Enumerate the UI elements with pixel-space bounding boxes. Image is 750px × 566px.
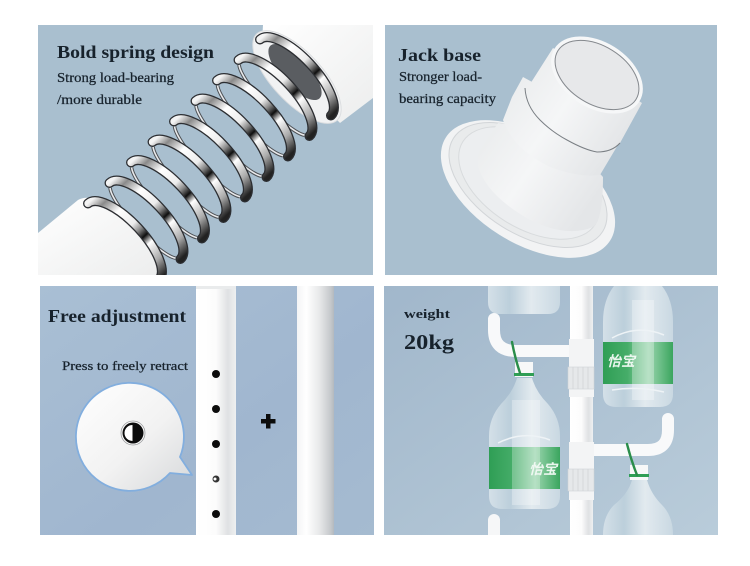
heading: free adjustment: Free adjustment xyxy=(48,306,186,326)
pole with adjustment holes xyxy=(196,286,236,535)
second pole xyxy=(297,286,334,535)
bottle: top right: 怡宝 xyxy=(607,353,637,369)
heading: jack base: Jack base xyxy=(398,45,481,65)
plus sign xyxy=(261,414,276,428)
panel: bold spring design xyxy=(38,17,373,280)
text: weight: weight xyxy=(404,306,451,321)
bottle: middle left: 怡宝 xyxy=(529,461,559,477)
bottle: lower right xyxy=(603,444,673,535)
pole xyxy=(570,286,593,535)
lower right hook xyxy=(592,419,668,450)
heading: bold spring design: Bold spring design xyxy=(57,42,214,62)
callout bubble with spring button xyxy=(76,383,192,491)
text: strong load-bearing: Strong load-bearing xyxy=(57,70,174,85)
bottle: middle left xyxy=(489,342,560,509)
text: more durable: /more durable xyxy=(57,92,142,107)
illustration: spring between tube ends xyxy=(38,17,373,280)
panel: free adjustment xyxy=(40,286,374,535)
hanger rack with bottles xyxy=(488,286,673,545)
panel: weight 20kg xyxy=(384,286,718,545)
upper left hook xyxy=(494,319,572,351)
bottle: top left xyxy=(488,286,560,314)
text: bearing capacity: bearing capacity xyxy=(399,91,496,106)
text: press to freely retract: Press to freely retract xyxy=(62,358,188,373)
bottle: top right xyxy=(603,286,673,407)
illustration: jack base xyxy=(417,21,657,286)
number: 20kg: 20kg xyxy=(404,330,455,354)
text: stronger load-: Stronger load- xyxy=(399,69,483,84)
lower left hook stub xyxy=(488,514,500,535)
panel: jack base xyxy=(385,21,717,286)
pole collars xyxy=(568,339,594,500)
